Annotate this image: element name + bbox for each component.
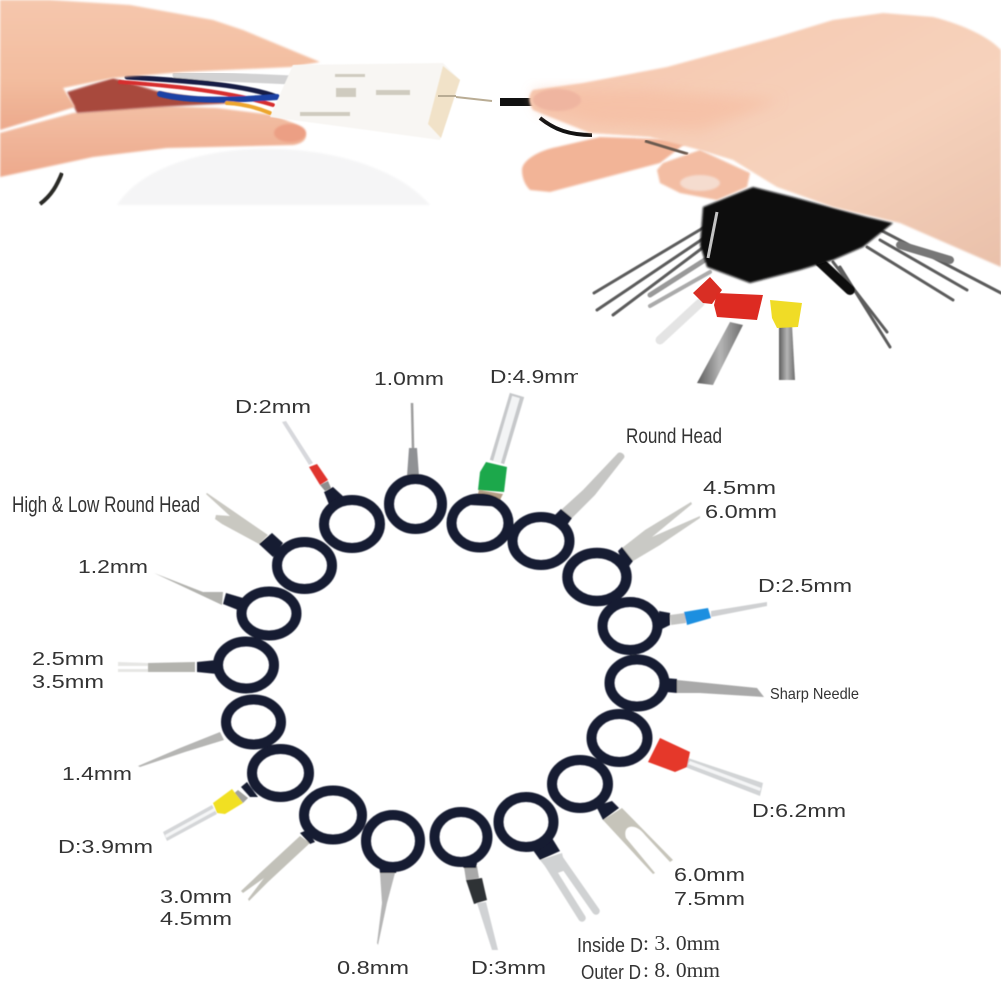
clip glint on finger [645,141,688,154]
tool: 1.2mm [154,573,296,636]
red sleeve back [693,277,722,304]
label: 1.0mm: 1.0mm [374,369,444,389]
tool: black sleeve D 3 [434,812,498,950]
label: 1.2mm: 1.2mm [78,557,148,577]
label: 2.5mm 3.5mm: 2.5mm [32,649,104,669]
label: D:3.9mm: D:3.9mm [58,837,153,857]
needle bundle [594,222,1001,347]
tool: green sleeve D 4.9 [452,395,517,548]
label: Sharp Needle: Sharp Needle [770,686,859,703]
tool: high and low round head [206,493,332,589]
fingernail [533,89,581,111]
labels [12,367,859,984]
tool ring diagram [118,395,767,950]
silver hook [708,212,717,258]
label: D:2mm: D:2mm [235,397,311,417]
silver stem large [697,322,743,385]
fingertip tint [274,124,306,142]
left hand upper fingers [0,0,320,130]
connector slots [300,74,410,116]
tool: 0.8mm pin [366,815,420,945]
label: 1.4mm: 1.4mm [62,764,132,784]
right hand [529,13,1001,267]
backdrop: pale white disc [117,149,430,205]
label: D:3mm: D:3mm [471,958,546,978]
connector end face [428,66,460,138]
black ring cluster [700,187,893,283]
tool: fork 3.0 4.5 [241,790,362,901]
label: Outer D 8.0mm [581,958,720,984]
finger shade [533,90,780,130]
second thumb [657,150,750,200]
label: 4.5mm 6.0mm [703,478,777,522]
label: 6.0mm 7.5mm: 6.0mm [674,865,745,885]
photo: right hand holding tool set [500,13,1001,385]
label: D:4.9mm: D:4.9mm [490,367,582,387]
label: 3.0mm 4.5mm [160,887,232,929]
label: Inside D 3.0mm [577,931,720,957]
wire bundle [120,75,292,113]
tool: fork 6.0 7.5 [552,760,673,874]
lower finger [522,137,690,192]
black loop under finger [540,118,592,135]
silver stem small [779,325,795,380]
label: D:6.2mm: D:6.2mm [752,801,846,821]
tool: fork round ends [498,797,596,918]
label: 4.5mm 6.0mm: 4.5mm [703,478,776,498]
label: 2.5mm 3.5mm: 3.5mm [32,672,104,692]
label: 2.5mm 3.5mm [32,649,104,692]
photo: left hand holding connector [0,0,492,205]
tool: 1.0mm pin [389,403,442,529]
label: Outer D 8.0mm: Outer D [581,962,641,984]
label: 3.0mm 4.5mm: 4.5mm [160,909,232,929]
label: Round Head: Round Head [626,425,722,448]
tool: fork 4.5 6.0 [568,502,700,601]
thumbnail [680,175,720,191]
tool: blue sleeve D 2.5 [602,602,767,650]
yellow sleeve [770,300,802,328]
tool: round head [512,452,624,565]
left hand lower finger [0,106,306,177]
tool: red sleeve D 6.2 [592,714,763,796]
tool: yellow sleeve D 3.9 [163,749,309,841]
tool: small red sleeve D 2 [282,421,380,548]
lower stray wire [40,173,62,204]
label: 4.5mm 6.0mm: 6.0mm [705,502,777,522]
tool: 1.4mm [138,700,281,767]
white connector block [270,63,460,140]
tool: fork 2.5 3.5 [118,642,274,688]
label: 0.8mm: 0.8mm [337,958,409,978]
label: 6.0mm 7.5mm [674,865,745,909]
pin into connector [438,96,492,101]
label: 6.0mm 7.5mm: 7.5mm [674,889,745,909]
label: 3.0mm 4.5mm: 3.0mm [160,887,232,907]
label: D:2.5mm: D:2.5mm [758,576,852,596]
label: Inside D 3.0mm: : 3. 0mm [643,931,720,955]
label: Inside D 3.0mm: Inside D [577,935,643,957]
label: Outer D 8.0mm: : 8. 0mm [643,958,720,982]
black wire tip [500,98,535,106]
tool: sharp needle [610,660,764,706]
label: High and Low Round Head: High & Low Round Head [12,492,200,517]
shadow inside hand [67,78,235,113]
red sleeve front [714,293,763,320]
